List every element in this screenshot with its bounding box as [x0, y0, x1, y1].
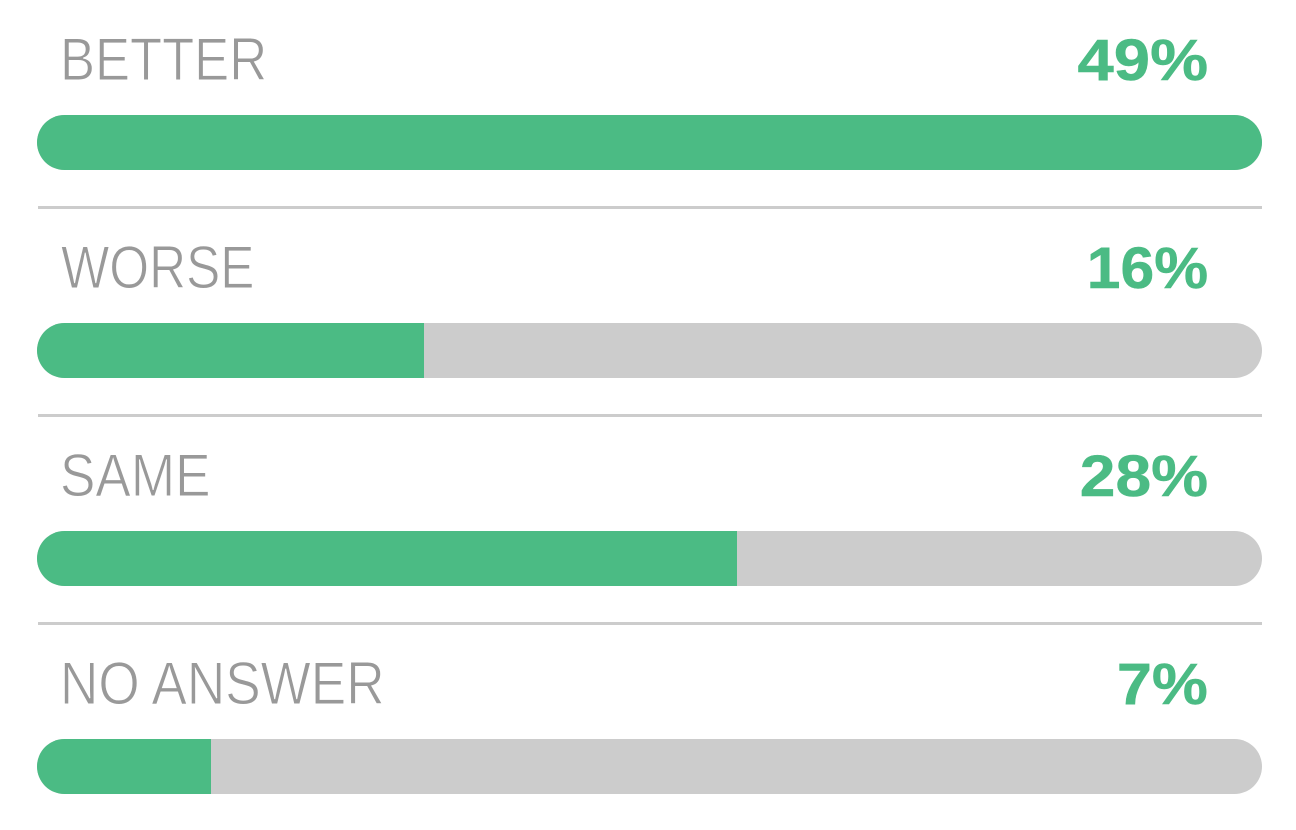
bar: same	[37, 531, 1262, 586]
row: same	[37, 442, 1262, 586]
label: same: SAME	[60, 442, 210, 509]
value: 7%: 7%	[1117, 652, 1208, 717]
bar: better	[37, 115, 1262, 170]
bar: worse	[37, 323, 1262, 378]
label: no answer: NO ANSWER	[60, 650, 385, 717]
value: 16%: 16%	[1087, 236, 1208, 301]
row: no answer	[37, 650, 1262, 794]
bar: no answer	[37, 739, 1262, 794]
row: better	[37, 26, 1262, 170]
value: 28%: 28%	[1080, 444, 1208, 509]
value: 49%: 49%	[1077, 28, 1208, 93]
label: worse: WORSE	[61, 234, 254, 301]
label: better: BETTER	[60, 26, 267, 93]
row: worse	[37, 234, 1262, 378]
